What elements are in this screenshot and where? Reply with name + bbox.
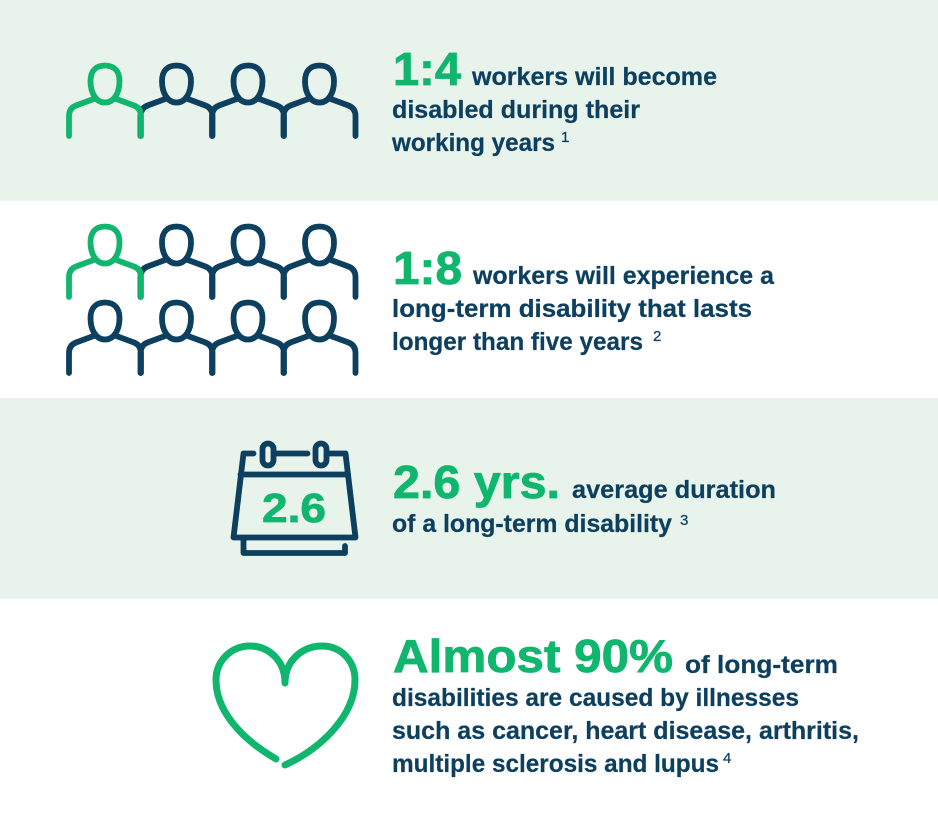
text: workers will become disabled: working years bbox=[391, 129, 555, 157]
text: of long-term disabilities bbox=[392, 651, 859, 778]
text: average duration of a long-term disability: of a long-term disability bbox=[392, 510, 672, 538]
icon: calendar showing 2.6: 2.6 bbox=[262, 485, 326, 531]
text: workers will become disabled: disabled during their bbox=[392, 96, 640, 124]
icon: heart outline bbox=[216, 646, 355, 765]
text: average duration of a long-term disability: 3 bbox=[680, 512, 688, 529]
text: average duration of a long-term disability: average duration bbox=[572, 476, 776, 504]
statistic: 1:8: 1:8 bbox=[393, 242, 462, 294]
text: of long-term disabilities: 4 bbox=[723, 750, 731, 767]
text: of long-term disabilities: such as cancer, heart disease, arthritis, bbox=[392, 717, 859, 745]
text: workers will experience long-term disability bbox=[392, 262, 775, 356]
statistic: Almost 90%: Almost 90% bbox=[393, 630, 673, 682]
icon: two rows of people bbox=[69, 226, 356, 373]
icon: row of four people bbox=[69, 66, 356, 136]
text: average duration of a long-term disability bbox=[392, 476, 776, 538]
text: workers will become disabled: 1 bbox=[561, 129, 569, 146]
text: workers will experience long-term disability: long-term disability that lasts bbox=[392, 295, 752, 323]
panel: 1 in 4 workers bbox=[0, 0, 938, 201]
text: of long-term disabilities: disabilities are caused by illnesses bbox=[392, 684, 799, 712]
text: workers will experience long-term disability: longer than five years bbox=[392, 328, 643, 356]
statistic: 1:4: 1:4 bbox=[393, 43, 461, 95]
icon: calendar showing 2.6 bbox=[234, 444, 356, 553]
text: of long-term disabilities: of long-term bbox=[685, 651, 838, 679]
text: workers will experience long-term disability: 2 bbox=[653, 328, 661, 345]
text: workers will experience long-term disability: workers will experience a bbox=[472, 262, 775, 290]
panel: average duration bbox=[0, 398, 938, 599]
panel: causes of long-term disability bbox=[0, 599, 938, 813]
panel: 1 in 8 workers bbox=[0, 201, 938, 398]
text: workers will become disabled: workers will become bbox=[471, 63, 717, 91]
text: workers will become disabled bbox=[391, 63, 717, 157]
text: of long-term disabilities: multiple sclerosis and lupus bbox=[392, 750, 719, 778]
statistic: 2.6 yrs.: 2.6 yrs. bbox=[393, 456, 560, 508]
